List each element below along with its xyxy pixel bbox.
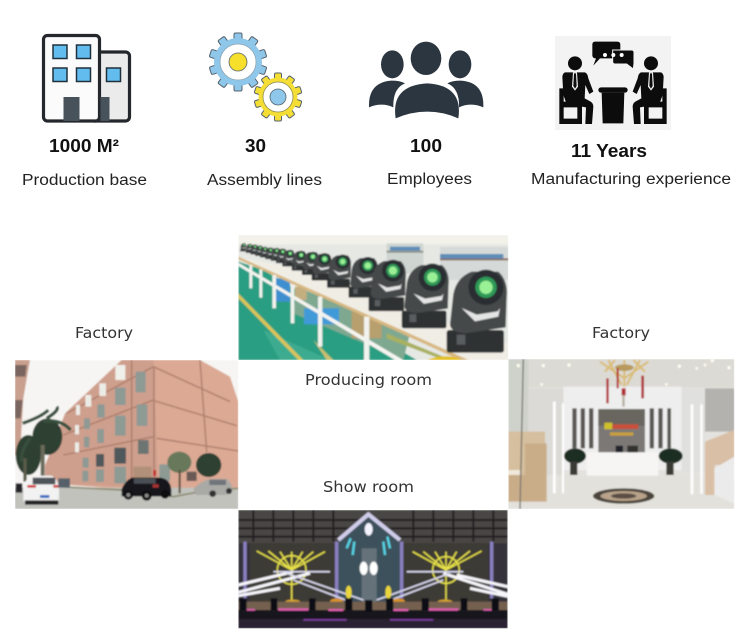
stat: assembly lines: 30	[245, 136, 266, 156]
label: show room: Show room	[323, 478, 414, 496]
stat: employees: Employees	[387, 171, 472, 188]
stat: assembly lines: Assembly lines	[207, 172, 322, 189]
icon: three people	[369, 42, 483, 118]
stat: manufacturing experience	[531, 141, 731, 188]
label: producing room: Producing room	[305, 371, 432, 389]
icon: office building	[44, 36, 130, 121]
photo: factory building exterior	[15, 360, 238, 509]
stat: employees	[387, 136, 472, 188]
stat: production base: Production base	[22, 172, 147, 189]
label: factory left: Factory	[75, 324, 133, 342]
stat: employees: 100	[410, 136, 442, 156]
photo: producing room with moving head lights	[238, 235, 508, 360]
label: factory right: Factory	[592, 324, 650, 342]
stat: assembly lines	[207, 136, 322, 189]
photo: reception hall	[508, 359, 734, 509]
stat: production base: 1000 M²	[49, 136, 119, 156]
stat: manufacturing experience: Manufacturing experience	[531, 171, 731, 188]
icon: gears	[209, 33, 302, 121]
stat: production base	[22, 136, 147, 189]
stat: manufacturing experience: 11 Years	[571, 141, 647, 161]
icon: business meeting	[555, 36, 671, 130]
photo: show room stage lighting	[238, 510, 508, 628]
